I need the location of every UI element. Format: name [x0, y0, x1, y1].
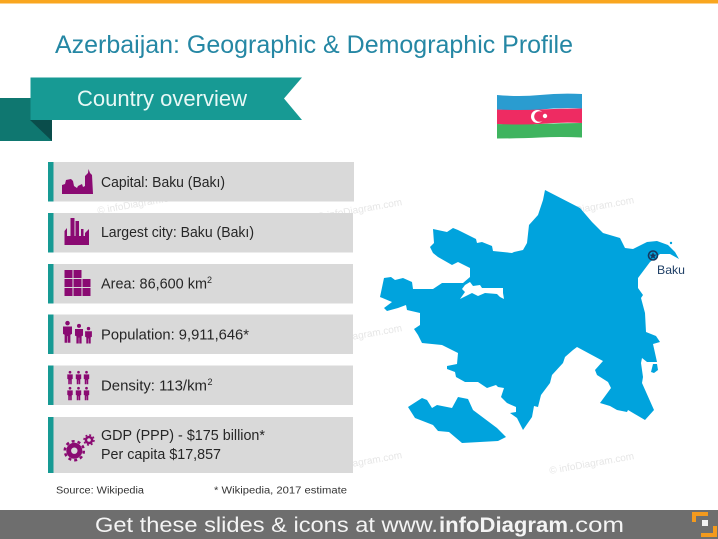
- text: © infoDiagram.com: [97, 191, 183, 217]
- icon: density: [67, 371, 89, 400]
- population text: Population: 9,911,646*: [101, 328, 249, 344]
- title: Azerbaijan: Geographic & Demographic Profile: [55, 31, 573, 59]
- icon: area squares: [64, 270, 90, 296]
- map of Azerbaijan: [380, 190, 679, 443]
- logo: [692, 512, 717, 537]
- ribbon: Country overview: [0, 78, 302, 141]
- area text: Area: 86,600 km: [101, 276, 207, 292]
- row: density: 2: [208, 377, 213, 387]
- flag of Azerbaijan: [497, 94, 582, 138]
- largest city text: Largest city: Baku (Bakı): [101, 225, 254, 241]
- footer text: Get these slides & icons at www.: [95, 514, 438, 537]
- top accent bar: [0, 0, 718, 4]
- footer bar: [0, 510, 718, 539]
- capital text: Capital: Baku (Bakı): [101, 175, 225, 191]
- text: © infoDiagram.com: [549, 324, 635, 350]
- row: area: 2: [207, 275, 212, 285]
- text: © infoDiagram.com: [549, 451, 635, 477]
- label: Baku: Baku: [657, 263, 685, 277]
- ribbon heading: Country overview: [77, 86, 247, 111]
- row: population: [48, 314, 353, 354]
- marker: Baku: [648, 251, 658, 260]
- footer text: infoDiagram: [439, 514, 568, 537]
- estimate note: * Wikipedia, 2017 estimate: [214, 486, 347, 496]
- icon: largest city: [64, 218, 89, 245]
- text: © infoDiagram.com: [317, 197, 403, 223]
- source note: Source: Wikipedia: [56, 486, 144, 496]
- icon: population: [63, 321, 92, 344]
- density text: Density: 113/km: [101, 378, 207, 394]
- icon: capital skyline: [62, 169, 93, 194]
- icon: gears: [65, 435, 94, 460]
- row: GDP: [48, 417, 353, 473]
- row: GDP: Per capita $17,857: [101, 447, 221, 463]
- row: capital: [48, 162, 354, 202]
- text: © infoDiagram.com: [317, 450, 403, 476]
- row: largest city: [48, 213, 353, 252]
- small island: [651, 364, 658, 373]
- footer text: [95, 514, 624, 537]
- footer text: .com: [568, 514, 624, 537]
- row: density: [48, 366, 353, 405]
- GDP text: GDP (PPP) - $175 billion*: [101, 428, 265, 444]
- text: © infoDiagram.com: [549, 195, 635, 221]
- row: area: [48, 264, 353, 304]
- exclave: [408, 397, 506, 443]
- text: © infoDiagram.com: [317, 323, 403, 349]
